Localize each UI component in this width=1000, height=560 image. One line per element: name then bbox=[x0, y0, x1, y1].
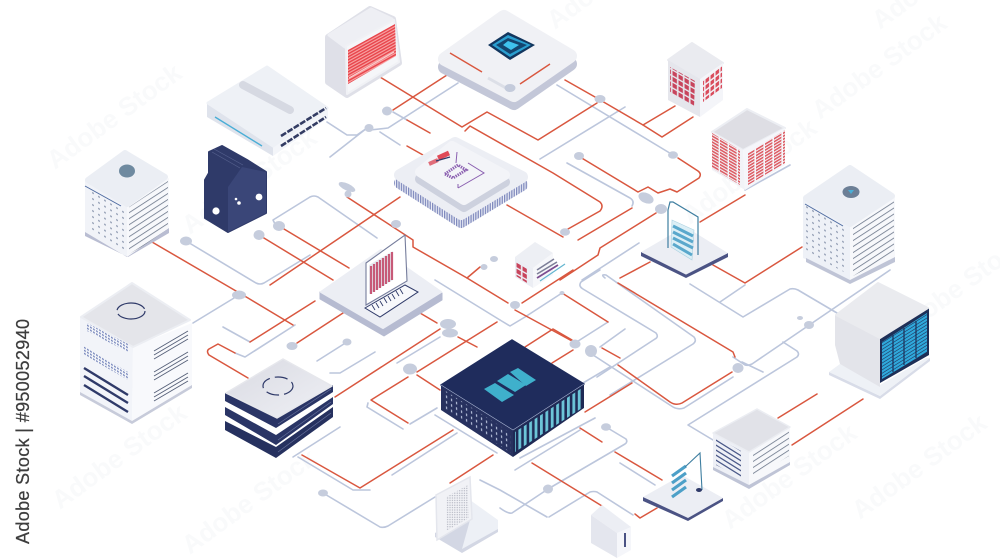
cube left face bbox=[712, 132, 745, 190]
cube badge bbox=[119, 164, 135, 178]
right face bbox=[513, 384, 584, 457]
tray side bbox=[445, 25, 570, 103]
cyan bars bbox=[484, 383, 514, 402]
platform side bbox=[400, 151, 522, 222]
dark stripes bbox=[84, 368, 128, 412]
cube base bbox=[713, 462, 790, 489]
enclosure front bbox=[228, 167, 266, 232]
cube right face bbox=[743, 128, 785, 190]
box wall bbox=[462, 500, 498, 549]
device: small red grid cube bbox=[668, 43, 723, 117]
router light bbox=[215, 117, 262, 146]
watermark: Adobe Stock bbox=[176, 122, 323, 240]
cube base bbox=[806, 257, 895, 284]
server base bbox=[829, 358, 930, 399]
platform top bbox=[400, 143, 522, 214]
chip bbox=[488, 32, 535, 60]
bottom layer bbox=[225, 407, 333, 458]
server base bbox=[80, 385, 192, 424]
watermark: Adobe Stock bbox=[806, 7, 953, 125]
monitor top bbox=[329, 9, 392, 47]
red connection lines bbox=[152, 75, 863, 518]
connector nodes bbox=[180, 95, 814, 496]
watermark: Adobe Stock bbox=[41, 57, 188, 175]
upper slab side bbox=[420, 153, 505, 207]
cube top bbox=[668, 43, 723, 79]
box right face bbox=[617, 527, 631, 558]
router left side bbox=[207, 103, 273, 156]
device: router bbox=[207, 67, 328, 156]
server top bbox=[81, 283, 190, 347]
server left face bbox=[80, 317, 133, 423]
router ports bbox=[281, 108, 326, 146]
tray marks bbox=[450, 53, 550, 84]
screen bars bbox=[371, 252, 392, 294]
server right face bbox=[132, 323, 192, 423]
enclosure body bbox=[205, 146, 266, 232]
document texture bbox=[446, 485, 469, 531]
cube right face bbox=[850, 197, 895, 280]
device: red-screen monitor bbox=[328, 9, 399, 95]
cube right face bbox=[127, 178, 169, 257]
top layer bbox=[225, 385, 333, 428]
screen bbox=[366, 235, 407, 305]
cube right face bbox=[533, 253, 553, 288]
middle layer bbox=[225, 397, 333, 445]
grey connection lines bbox=[186, 83, 890, 527]
device: blue panel server bbox=[829, 283, 930, 399]
device: lined cube bbox=[713, 409, 790, 489]
watermark: Adobe Stock bbox=[176, 442, 323, 560]
dashed ring bbox=[263, 377, 293, 395]
cube left face bbox=[713, 433, 749, 488]
mesh bands bbox=[87, 323, 128, 352]
left face bbox=[441, 385, 513, 457]
cube left face bbox=[803, 198, 850, 280]
platform top bbox=[642, 227, 727, 274]
cube base bbox=[85, 228, 169, 257]
watermark: Adobe Stock bbox=[46, 397, 193, 515]
document panel bbox=[436, 477, 472, 540]
box top bbox=[591, 505, 631, 533]
device: document box bottom bbox=[435, 477, 498, 553]
cube badge bbox=[842, 186, 860, 198]
cube top bbox=[515, 242, 553, 268]
device: small file cube bbox=[515, 242, 565, 288]
arc wire bbox=[685, 453, 702, 490]
router right side bbox=[273, 108, 328, 156]
device: left cube server bbox=[85, 153, 169, 257]
document rows bbox=[671, 220, 694, 260]
monitor screen bbox=[348, 24, 396, 84]
device: dark stacked server bbox=[225, 359, 333, 458]
cube left face bbox=[668, 60, 700, 117]
file lines bbox=[537, 259, 557, 274]
platform base bbox=[643, 497, 723, 521]
keyboard bbox=[365, 285, 418, 317]
purple cart chart bbox=[445, 165, 466, 178]
cube top bbox=[713, 409, 790, 452]
top ring bbox=[117, 303, 145, 319]
platform top bbox=[643, 475, 723, 518]
router slot bbox=[243, 85, 290, 110]
cube right face bbox=[700, 63, 723, 117]
device: small box bottom bbox=[591, 505, 631, 558]
stock id caption: Adobe Stock | #950052940 bbox=[13, 319, 33, 544]
device: right cube server bbox=[803, 168, 895, 284]
cube right face bbox=[749, 427, 790, 488]
top face bbox=[226, 359, 332, 418]
top face bbox=[441, 340, 584, 430]
device: central platform bbox=[400, 143, 522, 222]
cube top bbox=[712, 109, 785, 150]
device: chip tray bbox=[445, 17, 570, 103]
box left face bbox=[591, 515, 617, 558]
enclosure holes bbox=[212, 207, 220, 215]
device: big left server bbox=[80, 283, 192, 424]
monitor front bbox=[346, 20, 399, 94]
device: document platform right bbox=[641, 202, 728, 278]
platform side bbox=[320, 292, 442, 336]
box indicator bbox=[624, 533, 626, 547]
red bars bbox=[438, 153, 449, 158]
cube top bbox=[806, 168, 892, 224]
device: red stripe cube bbox=[712, 109, 785, 190]
device: main dark server bbox=[441, 340, 584, 457]
cube top bbox=[88, 153, 165, 204]
watermark: Adobe Stock bbox=[716, 417, 863, 535]
document rows bbox=[672, 466, 686, 497]
device: dark enclosure bbox=[205, 146, 266, 232]
tray top bbox=[445, 17, 570, 95]
cube left face bbox=[85, 180, 127, 257]
vent lines bbox=[154, 331, 188, 401]
device: bottom right platform bbox=[643, 453, 723, 521]
server left face bbox=[835, 315, 880, 387]
watermark: Adobe Stock bbox=[676, 112, 823, 230]
server right face bbox=[880, 308, 929, 383]
box base bbox=[435, 512, 498, 553]
platform top bbox=[321, 250, 441, 328]
router top bbox=[208, 67, 327, 146]
cube left face bbox=[515, 257, 533, 288]
device: left laptop platform bbox=[320, 235, 442, 336]
upper slab top bbox=[420, 146, 505, 200]
enclosure vents bbox=[212, 149, 243, 168]
document frame bbox=[668, 202, 698, 255]
watermark: Adobe Stock bbox=[846, 407, 993, 525]
server top bbox=[836, 283, 928, 338]
platform base bbox=[641, 252, 728, 278]
monitor body bbox=[328, 9, 399, 95]
layer details bbox=[278, 389, 331, 452]
